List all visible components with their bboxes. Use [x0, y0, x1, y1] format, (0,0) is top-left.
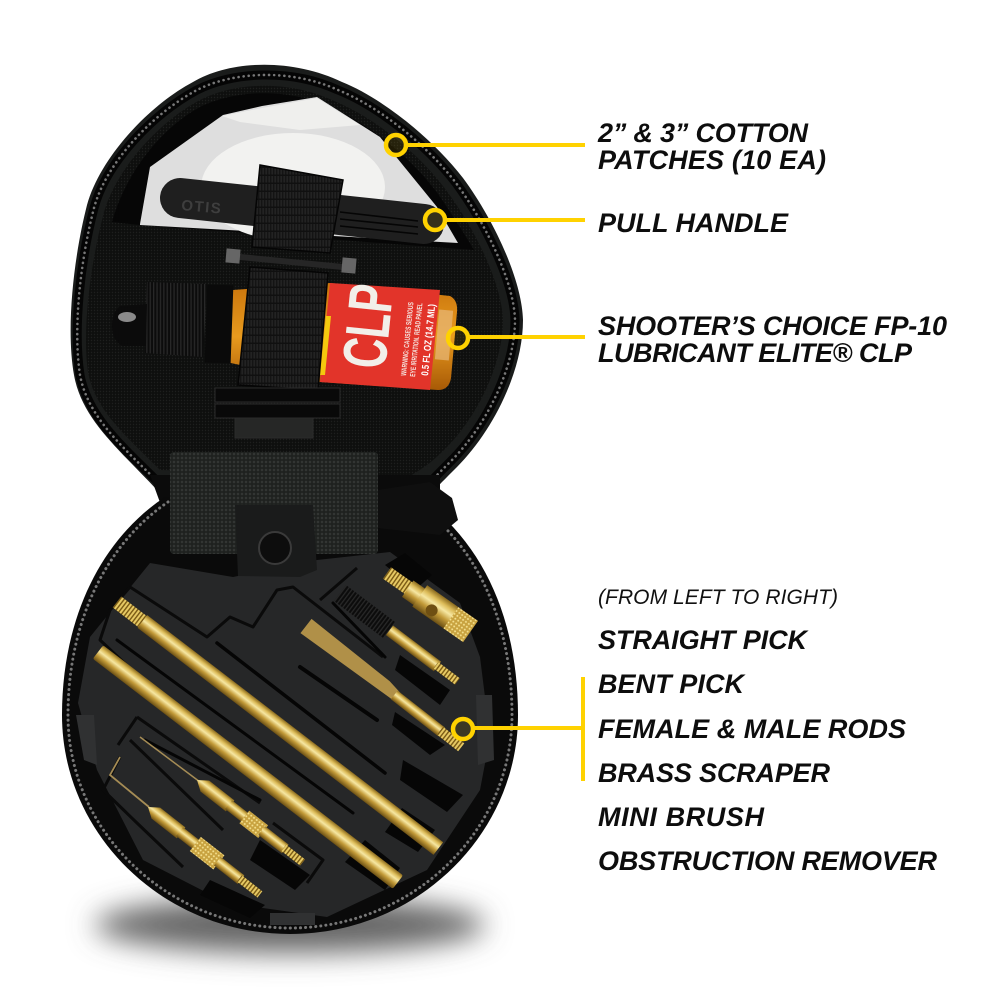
- brass: female rod: [112, 596, 443, 855]
- tray ridges: [100, 568, 383, 883]
- lower lid ribs: [215, 388, 340, 438]
- brass: male rod: [93, 645, 403, 889]
- straight pick: [140, 737, 308, 869]
- CLP bottle: EYE IRRITATION. READ PANEL: [408, 302, 424, 377]
- tools list: STRAIGHT PICK: [598, 625, 810, 655]
- callout: pull handle: PULL HANDLE: [598, 208, 789, 238]
- elastic strap: top: [252, 165, 343, 253]
- callout: cotton patches: [386, 118, 826, 175]
- tools list: BRASS SCRAPER: [598, 758, 830, 788]
- rod sockets: [200, 553, 463, 918]
- callout: lubricant: SHOOTER’S CHOICE FP-10: [598, 311, 947, 341]
- zipper: upper: [77, 75, 515, 492]
- retainer bar: [225, 248, 357, 274]
- callout: lubricant: LUBRICANT ELITE® CLP: [598, 338, 913, 368]
- callout: pull handle: [425, 208, 789, 238]
- tools list: [598, 586, 938, 876]
- hinge backing: [150, 475, 440, 530]
- lid interior mesh: [86, 86, 503, 476]
- callout: tools bracket: [453, 677, 583, 781]
- webbing hinge strap: [170, 452, 378, 554]
- callout: cotton patches: 2” & 3” COTTON: [597, 118, 808, 148]
- tray side tabs: [76, 695, 494, 925]
- tools list: OBSTRUCTION REMOVER: [598, 846, 938, 876]
- callout: cotton patches: PATCHES (10 EA): [598, 145, 826, 175]
- tools list: (FROM LEFT TO RIGHT): [598, 586, 838, 609]
- tools list: MINI BRUSH: [598, 802, 764, 832]
- CLP bottle: [112, 281, 457, 390]
- tray clip: [235, 505, 317, 577]
- callout: lubricant: [448, 311, 947, 368]
- bent pick: [110, 757, 265, 902]
- mini brush: [334, 585, 463, 689]
- pull handle: [180, 197, 424, 234]
- upper pouch: lid: [71, 65, 523, 500]
- cotton patches: [140, 97, 458, 243]
- zipper pull: [378, 482, 458, 535]
- lower pouch: base: [62, 497, 518, 934]
- obstruction remover: [380, 562, 478, 642]
- CLP bottle: WARNING: CAUSES SERIOUS: [399, 302, 415, 376]
- dark upper pocket: [112, 93, 474, 250]
- tray grooves: [117, 603, 385, 813]
- pull handle: OTIS: [181, 197, 223, 218]
- tools list: FEMALE & MALE RODS: [598, 714, 906, 744]
- tools list: BENT PICK: [598, 669, 746, 699]
- CLP bottle: CLP: [330, 281, 407, 371]
- brass scraper: [300, 619, 467, 754]
- inner tray: [78, 552, 490, 917]
- CLP bottle: 0.5 FL OZ (14.7 ML): [420, 304, 438, 376]
- ground shadow: [95, 897, 485, 953]
- bottle label: [320, 283, 440, 390]
- elastic strap: bottom: [238, 267, 328, 390]
- zipper: lower: [68, 502, 512, 928]
